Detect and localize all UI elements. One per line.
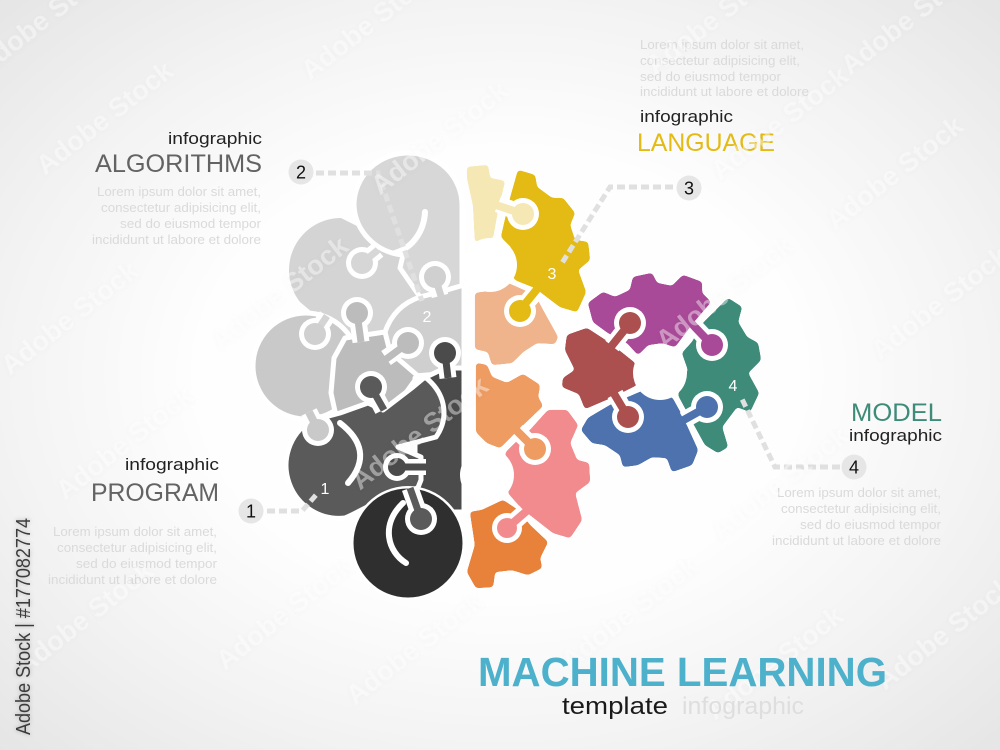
- text block: language: consectetur adipisicing elit,: [640, 54, 800, 68]
- text block: algorithms: sed do eiusmod tempor: [120, 217, 261, 231]
- gear piece: blue: [581, 391, 723, 472]
- text block: language: sed do eiusmod tempor: [640, 70, 781, 84]
- watermark pattern: Adobe Stock: [10, 555, 159, 681]
- text block: algorithms: consectetur adipisicing elit,: [101, 201, 261, 215]
- gear piece: red: [562, 307, 646, 433]
- text block: algorithms: Lorem ipsum dolor sit amet,: [97, 185, 261, 199]
- lobe: top: [354, 153, 462, 297]
- text block: language: [637, 38, 809, 157]
- text block: program: Lorem ipsum dolor sit amet,: [53, 525, 217, 539]
- knob: centre lobe upward: [341, 297, 373, 342]
- stock id label: Adobe Stock | #177082774: [12, 518, 35, 735]
- knob: pink: [507, 512, 525, 528]
- knob: centre lobe right: [385, 327, 424, 360]
- inner numbers: [321, 266, 738, 498]
- right brain gears: lower gear: [460, 363, 590, 588]
- text block: model: consectetur adipisicing elit,: [781, 502, 941, 516]
- gear piece: cream: [467, 165, 539, 242]
- lobe: centre star: [331, 332, 418, 416]
- watermark pattern: Adobe Stock: [820, 110, 969, 236]
- watermark pattern: Adobe Stock: [205, 230, 354, 356]
- knob: middle lobe into left lobe: [299, 316, 331, 350]
- text block: language: LANGUAGE: [637, 129, 775, 157]
- gear piece: peach: [475, 283, 558, 365]
- gear piece: orange: [467, 500, 548, 588]
- knob: dark column into mid dark: [383, 453, 428, 481]
- knob: yellow: [520, 294, 534, 310]
- title: infographic: [682, 693, 804, 720]
- title: template: [562, 693, 668, 720]
- text block: language: Lorem ipsum dolor sit amet,: [640, 38, 804, 52]
- text block: language: infographic: [640, 107, 734, 126]
- text block: program: consectetur adipisicing elit,: [57, 541, 217, 555]
- watermark pattern: Adobe Stock: [210, 550, 359, 676]
- watermark pattern: Adobe Stock: [340, 585, 489, 711]
- step marker 4: [842, 454, 866, 480]
- text block: algorithms: incididunt ut labore et dolore: [92, 233, 261, 247]
- inner numbers: 4: [729, 378, 738, 395]
- gear hub: right: [633, 346, 687, 400]
- lobe: bottom dark outline: [351, 486, 465, 600]
- gear piece: pink: [492, 410, 590, 543]
- watermark pattern: Adobe Stock: [30, 55, 179, 181]
- lobe: mid dark: [286, 377, 444, 518]
- text block: program: PROGRAM: [91, 479, 219, 507]
- watermark pattern: Adobe Stock: [700, 600, 849, 726]
- knob: purple: [696, 328, 712, 345]
- inner numbers: 2: [423, 309, 432, 326]
- lobe: dark right column: [415, 368, 464, 512]
- step marker 2: [288, 160, 314, 184]
- watermark pattern: Adobe Stock: [650, 230, 799, 356]
- text block: algorithms: ALGORITHMS: [95, 150, 262, 178]
- knob: red lower: [615, 394, 628, 417]
- step marker 1: 1: [246, 502, 256, 522]
- gear piece: purple: [588, 273, 728, 361]
- watermark pattern: Adobe Stock: [50, 380, 199, 506]
- inner numbers: 3: [548, 266, 557, 283]
- text block: model: Lorem ipsum dolor sit amet,: [777, 486, 941, 500]
- text block: language: incididunt ut labore et dolore: [640, 85, 809, 99]
- knob: right lobe into top lobe: [419, 261, 451, 296]
- white interlock arcs: [340, 212, 425, 563]
- step marker 3: 3: [684, 178, 694, 198]
- text block: program: infographic: [125, 455, 220, 474]
- step marker 2: 2: [296, 162, 306, 182]
- lobe: upper left middle: [289, 218, 420, 340]
- step marker 3: [676, 176, 702, 200]
- text block: program: [48, 455, 220, 587]
- knob: light orange: [517, 431, 535, 448]
- knob: cream: [498, 204, 523, 214]
- text block: algorithms: infographic: [168, 129, 263, 148]
- step marker 1: [238, 498, 264, 524]
- text block: model: infographic: [849, 426, 943, 445]
- right gear: large cog: [562, 273, 761, 472]
- lobe: left: [253, 313, 359, 419]
- knob: mid dark into bottom lobe: [405, 488, 437, 535]
- text block: model: [772, 399, 943, 548]
- step marker 4: 4: [849, 458, 859, 478]
- connector lines: [267, 173, 840, 511]
- text block: model: sed do eiusmod tempor: [800, 518, 941, 532]
- gear hub: lower: [460, 448, 514, 502]
- text block: algorithms: [92, 129, 263, 247]
- gear piece: light orange: [476, 363, 551, 465]
- watermark pattern: Adobe Stock: [705, 420, 854, 546]
- text block: model: MODEL: [851, 399, 942, 427]
- watermark pattern: Adobe Stock: [365, 75, 514, 201]
- gear piece: teal: [678, 298, 761, 453]
- watermark pattern: Adobe Stock: [555, 550, 704, 676]
- text block: model: incididunt ut labore et dolore: [772, 534, 941, 548]
- knob: blue: [684, 407, 707, 420]
- text block: program: sed do eiusmod tempor: [76, 557, 217, 571]
- inner numbers: 1: [321, 481, 330, 498]
- knob: dark column into right lobe: [429, 337, 461, 378]
- gear hub: upper: [463, 238, 517, 292]
- gear piece: yellow: [501, 170, 590, 327]
- knob: top lobe into middle lobe: [346, 247, 378, 279]
- title: MACHINE LEARNING: [478, 649, 887, 695]
- right brain gears: upper gear: [463, 165, 590, 365]
- text block: program: incididunt ut labore et dolore: [48, 573, 217, 587]
- left brain hemisphere: [253, 153, 465, 600]
- watermark pattern: Adobe Stock: [705, 60, 854, 186]
- knob: mid dark into centre lobe: [355, 371, 387, 410]
- knob: left lobe into mid dark: [302, 412, 334, 446]
- watermark pattern: Adobe Stock: [345, 370, 494, 496]
- knob: red upper: [612, 323, 630, 346]
- title: [478, 649, 887, 720]
- lobe: right small: [385, 285, 464, 376]
- lobe: bottom dark fill: [354, 488, 462, 598]
